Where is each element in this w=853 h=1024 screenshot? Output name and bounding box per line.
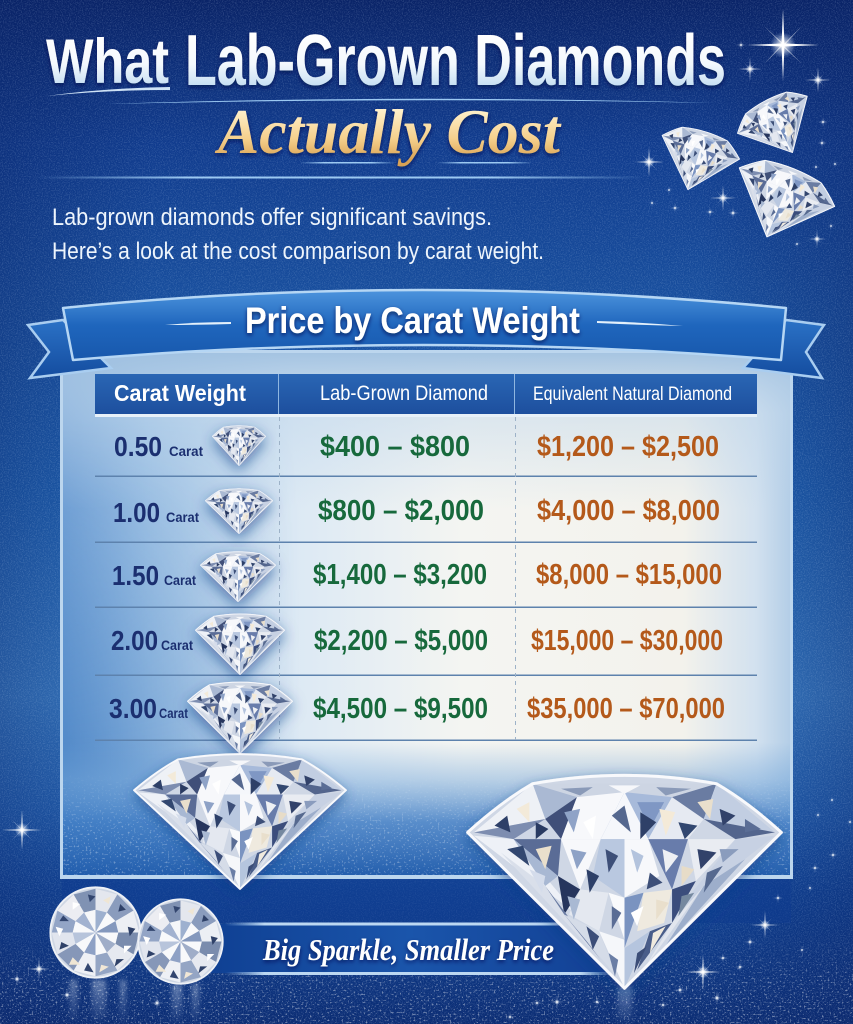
title underline swoosh bbox=[47, 87, 170, 96]
tagline text: Big Sparkle, Smaller Price bbox=[262, 932, 554, 967]
row: 2.00 carat bbox=[111, 614, 723, 675]
row: 3.00 carat: Carat bbox=[159, 705, 188, 721]
icon: three loose diamonds bbox=[649, 82, 842, 256]
ribbon heading: Price by Carat Weight bbox=[245, 300, 580, 341]
header: lab-grown diamond: Lab-Grown Diamond bbox=[320, 382, 488, 405]
subtitle flourish bbox=[300, 162, 532, 164]
ribbon accent lines bbox=[165, 321, 683, 326]
icon: large diamond bbox=[134, 754, 346, 889]
ribbon: price by carat weight bbox=[28, 290, 824, 378]
row: 2.00 carat: Carat bbox=[161, 637, 193, 653]
ribbon left tail bbox=[28, 320, 111, 378]
row: 1.50 carat: $8,000 – $15,000 bbox=[536, 559, 722, 591]
ribbon band bbox=[63, 290, 786, 360]
header: equivalent natural diamond: Equivalent Natural Diamond bbox=[533, 384, 732, 405]
title: What Lab-Grown Diamonds: What bbox=[46, 27, 169, 97]
intro text bbox=[52, 204, 544, 265]
table grid lines bbox=[95, 417, 757, 741]
title: Actually Cost: Actually Cost bbox=[214, 96, 562, 167]
icon: two round diamonds bbox=[50, 887, 223, 984]
row: 2.00 carat: $15,000 – $30,000 bbox=[531, 625, 723, 657]
row: 1.00 carat: $800 – $2,000 bbox=[318, 495, 484, 527]
row: 1.00 carat: Carat bbox=[166, 509, 199, 525]
row: 0.50 carat: $1,200 – $2,500 bbox=[537, 431, 719, 463]
row: 0.50 carat: $400 – $800 bbox=[320, 431, 470, 463]
row: 1.00 carat: 1.00 bbox=[113, 497, 160, 528]
row: 2.00 carat: 2.00 bbox=[111, 625, 158, 656]
row: 1.00 carat bbox=[113, 489, 720, 534]
sparkles bottom bbox=[2, 796, 853, 1022]
panel: price table bbox=[60, 350, 793, 878]
title: What Lab-Grown Diamonds bbox=[46, 21, 726, 101]
row: 1.50 carat: 1.50 bbox=[112, 560, 159, 591]
row: 2.00 carat: $2,200 – $5,000 bbox=[314, 625, 488, 657]
row: 1.50 carat: $1,400 – $3,200 bbox=[313, 559, 487, 591]
reflected light streaks bbox=[70, 980, 632, 1024]
title divider lower bbox=[35, 176, 645, 178]
title divider upper bbox=[105, 99, 715, 104]
tagline band bbox=[60, 876, 793, 975]
row: 0.50 carat bbox=[114, 426, 719, 466]
intro text: Lab-grown diamonds offer significant savings. bbox=[52, 204, 492, 231]
icon: extra large diamond bbox=[468, 775, 781, 988]
sparkles top right bbox=[634, 9, 839, 248]
row: 0.50 carat: Carat bbox=[169, 443, 203, 459]
row: 3.00 carat: $4,500 – $9,500 bbox=[313, 693, 488, 725]
row: 0.50 carat: 0.50 bbox=[114, 431, 162, 462]
floor sparkle bbox=[0, 935, 853, 1024]
header: carat weight: Carat Weight bbox=[114, 380, 246, 406]
table header bbox=[95, 374, 757, 417]
intro text: Here’s a look at the cost comparison by carat weight. bbox=[52, 238, 544, 265]
row: 1.50 carat: Carat bbox=[164, 572, 196, 588]
row: 3.00 carat: $35,000 – $70,000 bbox=[527, 693, 725, 725]
row: 3.00 carat bbox=[109, 682, 725, 753]
row: 1.50 carat bbox=[112, 552, 722, 602]
ribbon right tail bbox=[743, 320, 824, 378]
row: 1.00 carat: $4,000 – $8,000 bbox=[537, 495, 720, 527]
row: 3.00 carat: 3.00 bbox=[109, 693, 157, 724]
